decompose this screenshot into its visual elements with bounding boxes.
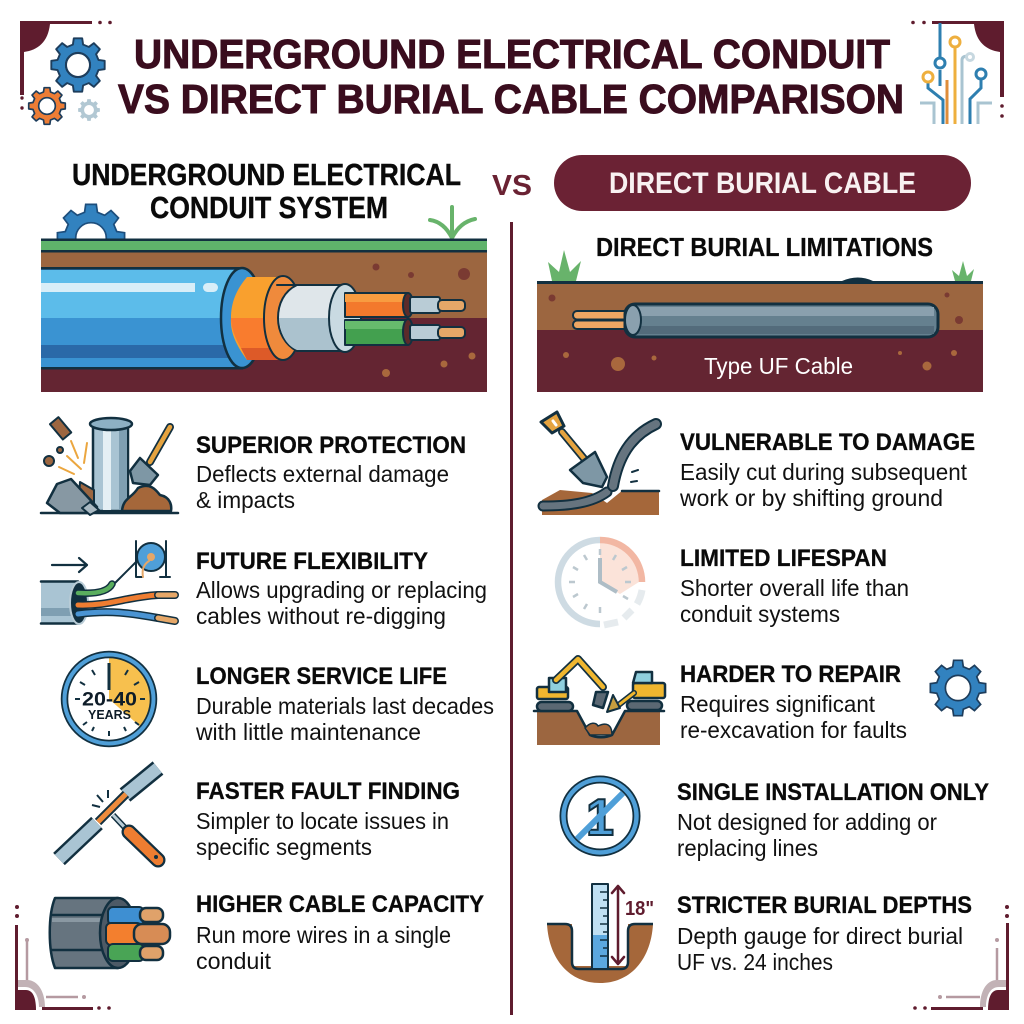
text: limited lifespan xyxy=(680,545,909,627)
text: superior protection: Deflects external damage xyxy=(196,461,449,487)
text: single installation only: Not designed for adding or xyxy=(677,809,937,835)
heading: direct burial limitations: DIRECT BURIAL LIMITATIONS xyxy=(596,232,933,262)
text: stricter burial depths: Depth gauge for direct burial xyxy=(677,923,963,949)
ground layers xyxy=(41,238,487,392)
text: faster fault finding: specific segments xyxy=(196,834,372,860)
icon: shovel cutting cable xyxy=(541,412,659,515)
text: vulnerable to damage: Easily cut during subsequent xyxy=(680,459,968,485)
text: harder to repair: re-excavation for faults xyxy=(680,717,907,743)
panel: conduit cross-section scene xyxy=(41,204,487,392)
heading: conduit column xyxy=(72,157,461,225)
text: higher cable capacity: HIGHER CABLE CAPACITY xyxy=(196,891,484,918)
icon: scene grass xyxy=(430,207,475,238)
text: superior protection: & impacts xyxy=(196,487,295,513)
icon: depth gauge: 18" xyxy=(625,898,654,920)
text: faster fault finding xyxy=(196,778,460,860)
ground layers xyxy=(537,278,983,392)
decorative corner: top right with circuit traces xyxy=(911,21,1004,124)
label: type uf cable: Type UF Cable xyxy=(704,353,853,379)
text: future flexibility xyxy=(196,548,487,629)
text: vulnerable to damage xyxy=(679,429,975,511)
text: superior protection: SUPERIOR PROTECTION xyxy=(196,432,466,459)
text: single installation only: replacing lines xyxy=(677,835,818,861)
icon: prohibited number one: 1 xyxy=(586,789,614,847)
icon: faded clock xyxy=(558,540,642,625)
text: superior protection xyxy=(196,432,466,513)
icon: 20-40 years clock: YEARS xyxy=(88,708,131,722)
heading pill: direct burial cable xyxy=(554,155,971,211)
text: limited lifespan: LIMITED LIFESPAN xyxy=(680,545,887,572)
vs label: VS xyxy=(492,170,532,202)
text: vulnerable to damage: VULNERABLE TO DAMAGE xyxy=(680,429,975,456)
cable with exposed wires xyxy=(573,304,938,337)
text: future flexibility: cables without re-digging xyxy=(196,603,446,629)
panel: direct burial scene xyxy=(537,250,983,392)
icon: cable pulled through conduit xyxy=(41,541,175,624)
text: harder to repair: Requires significant xyxy=(680,691,876,717)
heading: conduit column: CONDUIT SYSTEM xyxy=(150,190,388,225)
text: higher cable capacity xyxy=(196,891,484,974)
icon: 20-40 years clock: 20-40 xyxy=(82,688,137,710)
icon: side gear xyxy=(930,660,986,716)
text: longer service life: with little maintenance xyxy=(195,719,421,745)
conduit pipe with layers xyxy=(41,267,465,370)
icon: title gears xyxy=(29,38,105,124)
icon: scene gear xyxy=(57,204,125,272)
text: single installation only xyxy=(677,779,989,861)
decorative corner: bottom left xyxy=(15,905,111,1010)
text: longer service life: Durable materials last decades xyxy=(196,693,494,719)
text: vulnerable to damage: work or by shifting ground xyxy=(679,485,943,511)
heading pill: direct burial cable: DIRECT BURIAL CABLE xyxy=(609,167,916,200)
text: longer service life xyxy=(195,663,494,745)
icon: spliced pipe and screwdriver xyxy=(59,768,158,860)
text: higher cable capacity: Run more wires in a single xyxy=(196,922,451,948)
title xyxy=(118,31,904,122)
text: single installation only: SINGLE INSTALLATION ONLY xyxy=(677,779,989,806)
icon: depth gauge xyxy=(547,884,654,983)
text: harder to repair: HARDER TO REPAIR xyxy=(680,661,901,688)
text: stricter burial depths xyxy=(677,892,972,975)
text: limited lifespan: Shorter overall life than xyxy=(680,575,909,601)
text: longer service life: LONGER SERVICE LIFE xyxy=(196,663,447,690)
centre divider xyxy=(510,222,513,1015)
decorative corner: bottom right xyxy=(913,905,1009,1010)
text: harder to repair xyxy=(680,661,907,743)
icon: 20-40 years clock xyxy=(64,654,154,744)
text: future flexibility: FUTURE FLEXIBILITY xyxy=(196,548,428,575)
icon: pipe shielded from rocks and shovel xyxy=(41,417,178,515)
text: faster fault finding: FASTER FAULT FINDING xyxy=(196,778,460,805)
icon: multi-wire conduit end xyxy=(50,898,170,968)
title: UNDERGROUND ELECTRICAL CONDUIT xyxy=(134,31,890,77)
heading: conduit column: UNDERGROUND ELECTRICAL xyxy=(72,157,461,192)
title: VS DIRECT BURIAL CABLE COMPARISON xyxy=(118,76,904,122)
text: future flexibility: Allows upgrading or replacing xyxy=(196,577,487,603)
text: stricter burial depths: UF vs. 24 inches xyxy=(677,949,833,975)
text: stricter burial depths: STRICTER BURIAL DEPTHS xyxy=(677,892,972,919)
icon: excavators at trench xyxy=(534,659,665,745)
text: limited lifespan: conduit systems xyxy=(680,601,840,627)
decorative corner: top left xyxy=(20,21,112,110)
icon: scene grass left and right xyxy=(548,250,974,281)
text: higher cable capacity: conduit xyxy=(196,948,272,974)
text: faster fault finding: Simpler to locate issues in xyxy=(196,808,449,834)
icon: prohibited number one xyxy=(564,780,636,852)
